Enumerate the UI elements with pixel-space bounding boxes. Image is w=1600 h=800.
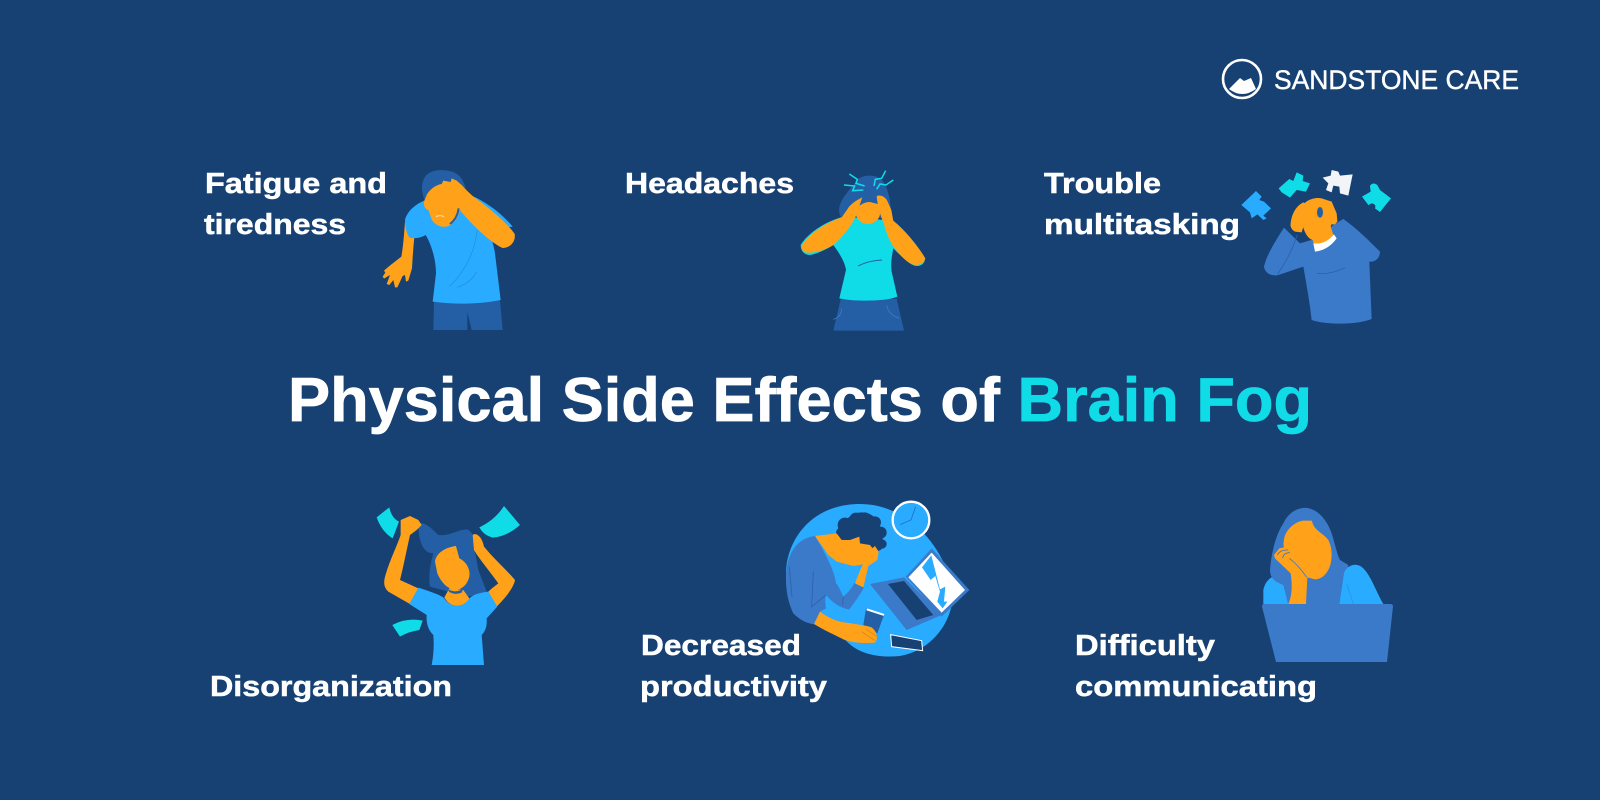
label: Trouble multitasking: [1044, 168, 1240, 241]
label: Trouble multitasking: Trouble: [1044, 168, 1161, 200]
logo: Sandstone Care: [1223, 60, 1519, 98]
label: Disorganization: Disorganization: [210, 671, 452, 703]
label: Decreased productivity: [640, 630, 827, 703]
label: Trouble multitasking: multitasking: [1044, 209, 1240, 241]
label: Fatigue and tiredness: tiredness: [204, 209, 346, 241]
icon: woman with headache: [801, 171, 925, 331]
icon: exhausted worker at laptop: [786, 502, 969, 657]
label: Headaches: Headaches: [625, 168, 794, 200]
icon: woman pulling hair with flying papers: [377, 506, 520, 665]
icon: tired man holding head: [383, 170, 515, 330]
title: Physical Side Effects of Brain Fog: [288, 366, 1312, 435]
label: Difficulty communicating: communicating: [1075, 671, 1317, 703]
label: Fatigue and tiredness: [204, 168, 387, 241]
icon: man with puzzle pieces: [1241, 170, 1391, 324]
clock: [893, 502, 929, 538]
logo: Sandstone Care: SANDSTONE CARE: [1274, 65, 1519, 95]
label: Decreased productivity: Decreased: [641, 630, 801, 662]
laptop: [1262, 604, 1393, 662]
label: Fatigue and tiredness: Fatigue and: [205, 168, 387, 200]
label: Decreased productivity: productivity: [640, 671, 827, 703]
label: Difficulty communicating: [1075, 630, 1317, 703]
label: Difficulty communicating: Difficulty: [1075, 630, 1215, 662]
icon: woman resting head at laptop: [1262, 508, 1393, 662]
